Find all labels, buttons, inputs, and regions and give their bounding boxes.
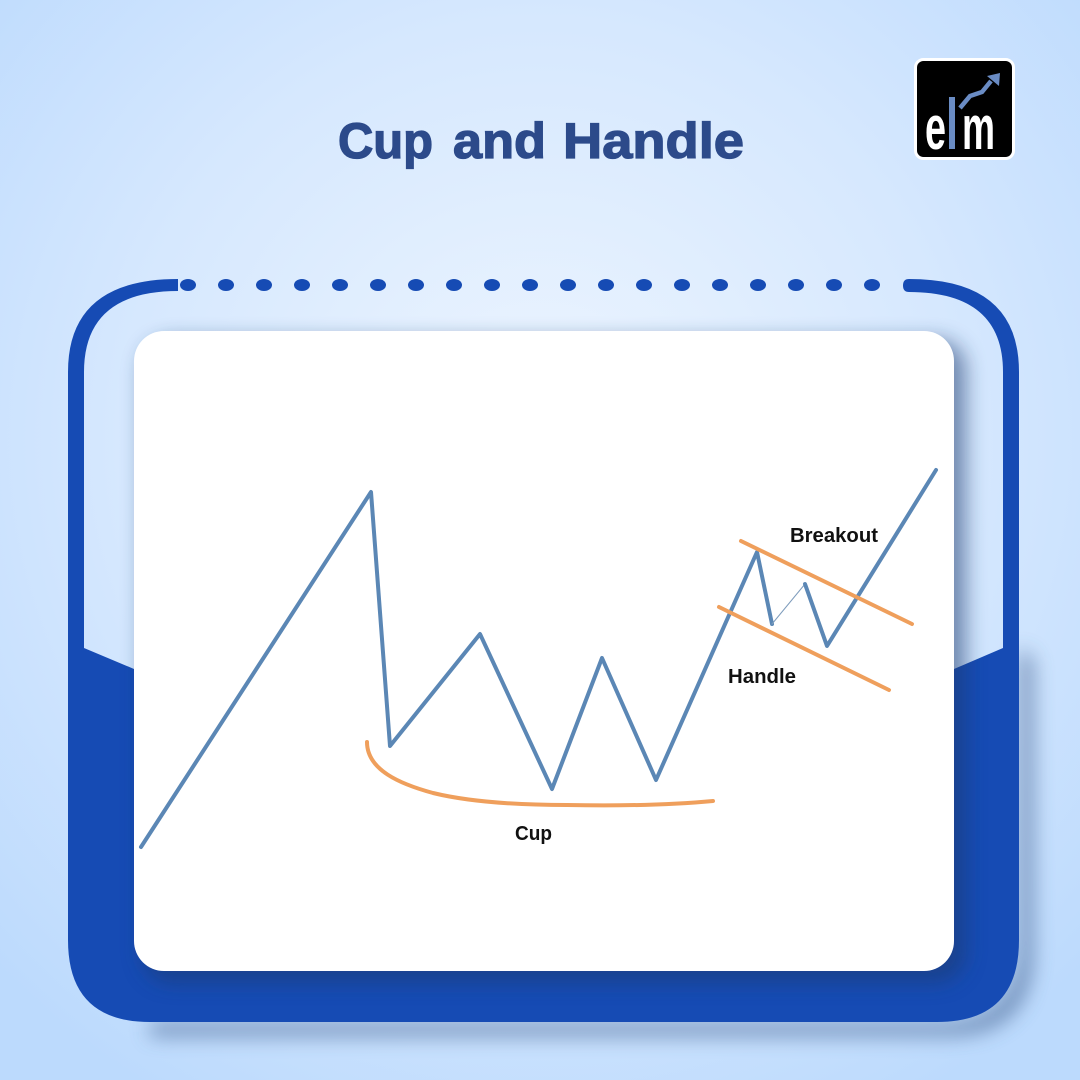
cup curve bbox=[367, 742, 713, 805]
label: breakout: Breakout bbox=[790, 525, 878, 547]
price line: breakout bbox=[805, 470, 936, 646]
label: cup: Cup bbox=[515, 823, 552, 845]
handle lower trend line bbox=[719, 607, 889, 690]
frame: shadow bbox=[150, 648, 1033, 1036]
handle upper trend line bbox=[741, 541, 912, 624]
card: white chart panel bbox=[134, 331, 954, 971]
icon: elm logo: e bbox=[925, 94, 946, 163]
title: and bbox=[453, 113, 546, 169]
title: Cup bbox=[338, 113, 433, 169]
frame: top outline with dotted line bbox=[68, 279, 1019, 660]
icon: elm logo bbox=[916, 60, 1014, 163]
icon: elm logo: m bbox=[962, 94, 995, 163]
price line: thin handle segment bbox=[772, 584, 805, 624]
frame: lower solid panel bbox=[68, 648, 1019, 1022]
dotted line bbox=[180, 279, 880, 291]
title bbox=[338, 113, 744, 169]
title: Handle bbox=[563, 113, 744, 169]
label: handle: Handle bbox=[728, 666, 796, 688]
card: shadow bbox=[142, 339, 966, 983]
chart: cup and handle pattern bbox=[141, 470, 936, 847]
price line bbox=[141, 492, 772, 847]
